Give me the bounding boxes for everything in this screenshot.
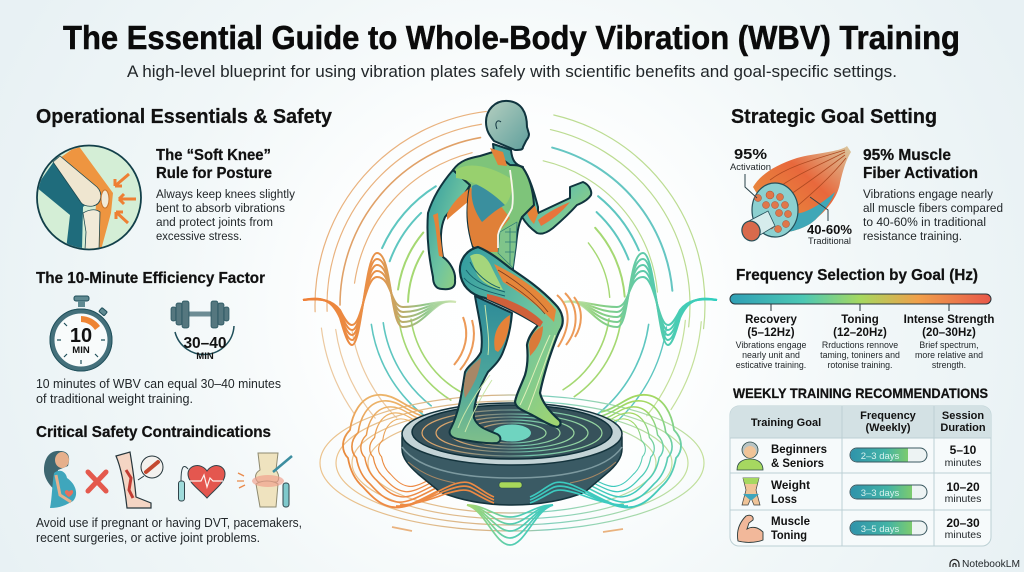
row: weight loss: minutes [945,493,981,505]
label: 95 percent activation: Activation [730,162,771,173]
table header: Duration [940,422,986,434]
frequency: toning: Rrductions rennove [822,340,898,350]
row: beginners and seniors: & Seniors [771,456,824,470]
NotebookLM badge: NotebookLM [962,559,1020,570]
row: muscle toning: Toning [771,528,807,542]
label: 40-60 percent traditional [807,223,852,247]
muscle fiber text: all muscle fibers compared [863,201,1003,215]
row: weight loss: 3–3 days [861,488,900,499]
panel: operational essentials and safety [36,106,333,545]
frequency: recovery [736,314,806,370]
weekly training table [730,406,991,546]
title: The Essential Guide to Whole-Body Vibration (WBV) Training [63,19,960,56]
wave strands crossing plate front and bottom wave [392,482,632,545]
muscle fiber heading [863,147,978,182]
table header [751,410,986,434]
row: muscle toning: Muscle [771,514,810,528]
frequency: toning [820,314,900,370]
icon: stopwatch: MIN [72,345,90,356]
frequency: recovery: esticative training. [736,360,806,370]
outer ripple ellipses [320,395,704,532]
frequency: toning: Toning [841,314,879,326]
heading: 10-minute efficiency: The 10-Minute Efficiency Factor [36,270,265,287]
heading: frequency selection: Frequency Selection by Goal (Hz) [736,267,978,284]
soft knee heading [156,147,272,182]
label: 40-60 percent traditional: 40-60% [807,223,852,237]
concentric vibration arcs [315,110,705,500]
table header: (Weekly) [865,422,911,434]
muscle fiber text: resistance training. [863,229,962,243]
row: muscle toning [737,514,981,542]
icon: dumbbell: 30–40 [183,335,227,352]
forward arm [522,168,591,234]
row: weight loss: Weight [771,478,810,492]
row: beginners and seniors: minutes [945,457,981,469]
frequency: recovery: Vibrations engage [736,340,806,350]
soft knee heading: Rule for Posture [156,165,272,182]
subtitle: A high-level blueprint for using vibration plates safely with scientific benefits and goal-specific settings. [127,63,897,81]
label: 95 percent activation: 95% [734,146,767,163]
icon: heart with pacemaker [178,466,225,501]
front leg and hip [460,247,563,427]
icon: joint [237,453,292,507]
row: beginners and seniors: Beginners [771,442,827,456]
frequency: toning: rotonise training. [827,360,893,370]
torso [453,148,534,275]
heading: operational essentials: Operational Essentials & Safety [36,106,333,128]
frequency: recovery: (5–12Hz) [747,327,795,339]
row: beginners and seniors: 2–3 days [861,451,900,462]
side waves [303,253,717,345]
contraindications text: Avoid use if pregnant or having DVT, pacemakers, [36,516,302,530]
contraindications text: recent surgeries, or active joint problems. [36,531,260,545]
heading: contraindications: Critical Safety Contraindications [36,424,271,441]
frequency: intense strength: Intense Strength [904,314,994,326]
icon: stopwatch [50,296,112,371]
muscle fiber text: Vibrations engage nearly [863,187,994,201]
row: beginners and seniors: 5–10 [950,443,977,457]
vibration plate [402,403,622,505]
soft knee text: bent to absorb vibrations [156,201,285,215]
frequency: toning: (12–20Hz) [833,327,887,339]
lower wave bundles behind plate [343,395,681,507]
back leg [450,296,512,443]
panel: strategic goal setting [730,106,1003,546]
icon: dumbbell: MIN [196,351,214,362]
frequency: toning: taming, toniners and [820,350,900,360]
label: 95 percent activation [730,146,771,173]
frequency: recovery: nearly unit and [742,350,800,360]
frequency: intense strength: strength. [932,360,966,370]
efficiency text: of traditional weight training. [36,392,193,406]
icon: pregnancy [44,451,76,508]
frequency spectrum bar [730,294,991,311]
table header: Session [942,410,984,422]
frequency: intense strength [904,314,994,370]
frequency: intense strength: Brief spectrum, [919,340,979,350]
icon: dumbbell [171,301,234,362]
table header: Frequency [860,410,917,422]
soft knee heading: The “Soft Knee” [156,147,271,164]
soft knee text: and protect joints from [156,215,273,229]
contraindications text [36,516,302,545]
row: muscle toning: minutes [945,529,981,541]
frequency: recovery: Recovery [745,314,797,326]
icon: stopwatch: 10 [70,325,92,347]
central illustration: vibration waves and figure on plate [303,101,717,545]
label: 40-60 percent traditional: Traditional [808,236,851,247]
soft knee text: excessive stress. [156,229,242,243]
row: weight loss: 10–20 [946,480,980,494]
efficiency text [36,377,281,406]
icon: DVT leg [116,452,163,508]
soft knee text [156,187,296,243]
row: muscle toning: 20–30 [946,516,980,530]
efficiency text: 10 minutes of WBV can equal 30–40 minutes [36,377,281,391]
head [486,101,529,150]
icon: knee joint [36,140,145,250]
icon: red cross [88,472,106,491]
frequency: intense strength: (20–30Hz) [922,327,976,339]
knee vibration marks [454,293,581,370]
muscle fibre diagram [739,146,851,243]
row: weight loss [742,478,981,506]
muscle fiber heading: 95% Muscle [863,147,951,164]
rear arm [427,170,473,289]
heading: strategic goal setting: Strategic Goal Setting [731,106,937,128]
table header: Training Goal [751,417,821,429]
heading: weekly recommendations: WEEKLY TRAINING RECOMMENDATIONS [733,385,988,401]
soft knee text: Always keep knees slightly [156,187,296,201]
frequency: intense strength: more relative and [915,350,983,360]
muscle fiber heading: Fiber Activation [863,165,978,182]
row: weight loss: Loss [771,492,797,506]
neck [468,144,523,172]
row: beginners and seniors [737,442,981,470]
muscle fiber text [863,187,1003,243]
row: muscle toning: 3–5 days [861,524,900,535]
muscle fiber text: to 40-60% in traditional [863,215,986,229]
human figure [427,101,591,443]
